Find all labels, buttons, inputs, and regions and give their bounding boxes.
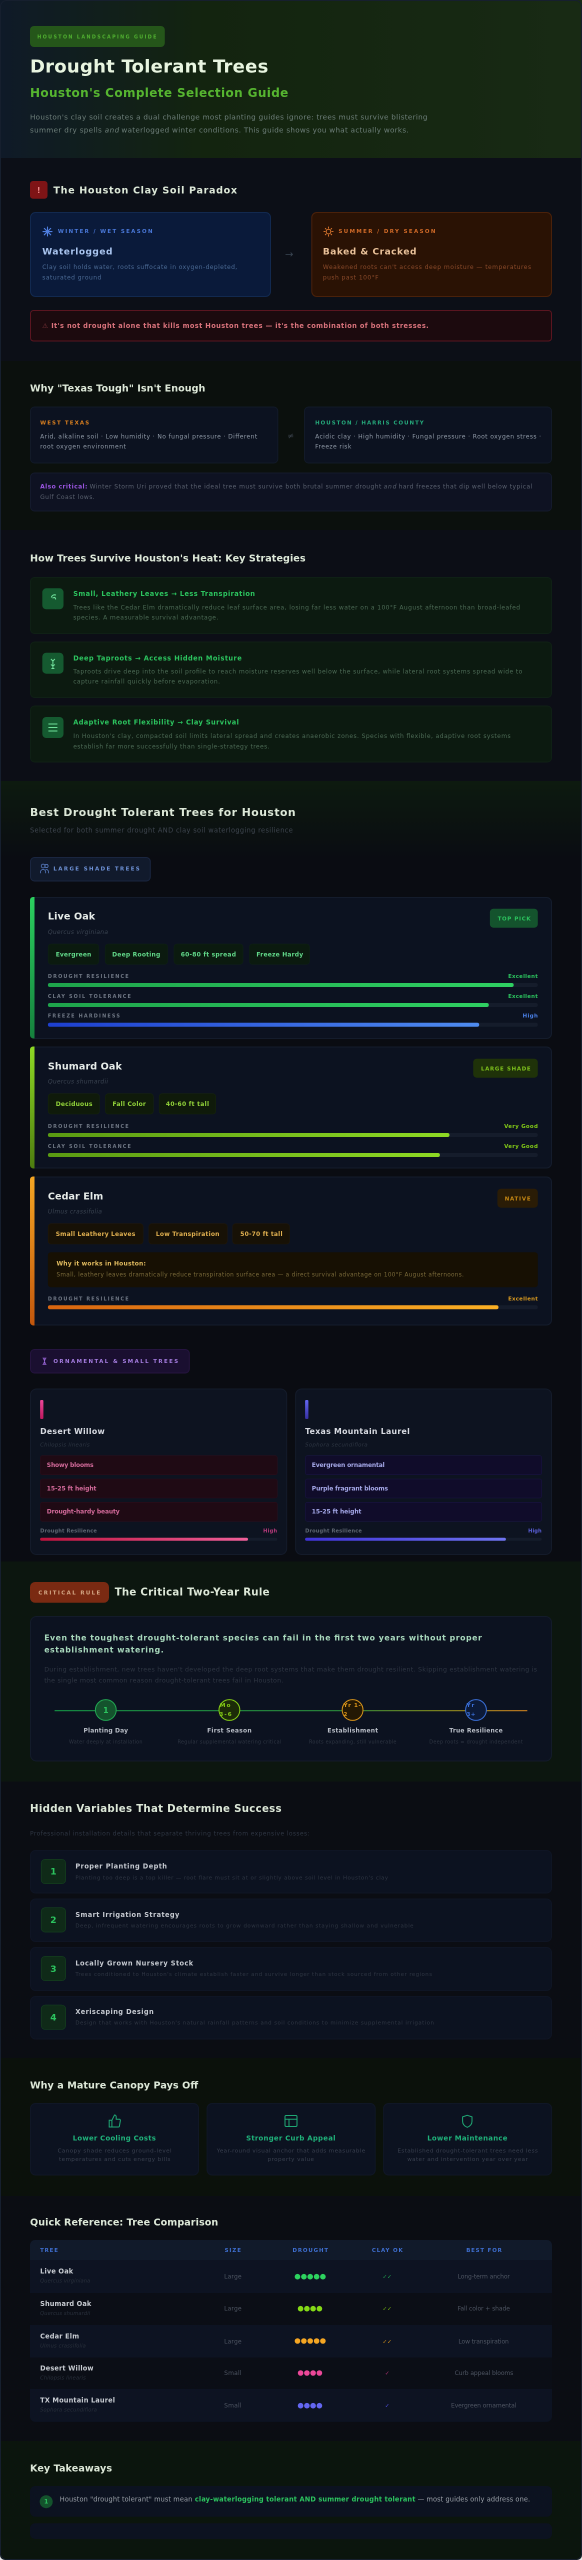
tags: Low Transpiration xyxy=(156,1231,219,1238)
title: Drought Tolerant Trees xyxy=(30,56,268,77)
meter: clay soil tolerance xyxy=(48,994,538,1007)
tags xyxy=(48,1094,216,1114)
card: deep taproots xyxy=(30,642,552,698)
category pill: ornamental and small trees xyxy=(30,1350,189,1373)
category pill: large shade trees xyxy=(30,858,150,881)
row: cedar elm: Large xyxy=(224,2338,242,2345)
tags: Fall Color xyxy=(112,1101,146,1108)
row: live oak: Large xyxy=(224,2274,242,2281)
panel: west texas: root oxygen environment xyxy=(40,444,126,451)
badge: large shade xyxy=(473,1059,538,1078)
row: live oak: ✓✓ xyxy=(383,2275,392,2281)
panel: summer dry season: push past 100°F xyxy=(323,274,379,281)
panel: summer dry season: Baked & Cracked xyxy=(323,247,416,257)
card: desert willow xyxy=(30,1389,287,1554)
step: establishment: Yr 1- xyxy=(342,1703,361,1709)
tags: 50-70 ft tall xyxy=(240,1231,282,1238)
step: planting day: Water deeply at installation xyxy=(69,1739,142,1745)
category pill: large shade trees: LARGE SHADE TREES xyxy=(53,867,140,873)
panel: west texas xyxy=(30,407,278,463)
card: small leathery leaves: Small, Leathery Leaves → Less Transpiration xyxy=(73,590,255,598)
panel: houston harris county: Acidic clay · High humidity · Fungal pressure · Root oxygen stress · xyxy=(315,433,541,440)
feature rows: 15-25 ft height xyxy=(312,1509,362,1516)
table header xyxy=(30,2240,552,2260)
panel: establishment xyxy=(30,1616,552,1761)
card: lower maintenance: Established drought-tolerant trees need less xyxy=(398,2148,538,2154)
meter: drought resilience: Very Good xyxy=(504,1124,538,1130)
takeaway 1: Houston "drought tolerant" must mean xyxy=(60,2495,192,2503)
card: texas mountain laurel: Sophora secundiflora xyxy=(305,1443,368,1449)
callout: also critical xyxy=(30,473,552,511)
heading: Why "Texas Tough" Isn't Enough xyxy=(30,384,206,395)
heading: Hidden Variables That Determine Success xyxy=(30,1804,282,1815)
subheading: Professional installation details that separate thriving trees from expensive losses: xyxy=(30,1830,310,1837)
badge: native: NATIVE xyxy=(505,1196,531,1202)
header xyxy=(0,0,582,158)
row: shumard oak: Fall color + shade xyxy=(458,2306,510,2313)
section: key strategies xyxy=(0,530,582,781)
heading: Key Takeaways xyxy=(30,2464,112,2475)
subtitle: Houston's Complete Selection Guide xyxy=(30,86,288,100)
badge: top pick: TOP PICK xyxy=(498,916,531,922)
lead statement xyxy=(44,1634,482,1655)
card: desert willow: Desert Willow xyxy=(40,1427,105,1436)
callout: combination of stresses xyxy=(30,310,552,341)
icon: snow star xyxy=(43,227,52,236)
step: establishment: Roots expanding, still vulnerable xyxy=(309,1739,396,1745)
heading: Quick Reference: Tree Comparison xyxy=(30,2217,218,2228)
badge: large shade: LARGE SHADE xyxy=(481,1066,531,1072)
item: xeriscaping design xyxy=(30,1996,552,2039)
meter: drought resilience: DROUGHT RESILIENCE xyxy=(48,974,129,980)
step: establishment xyxy=(309,1700,396,1745)
card: shumard oak: Quercus shumardii xyxy=(48,1079,108,1086)
icon: people xyxy=(40,864,48,873)
item: smart irrigation strategy: Deep, infrequent watering encourages roots to grow downward rather than staying shallow and vulnerable xyxy=(75,1924,414,1930)
icon: lines xyxy=(42,717,64,738)
row: cedar elm xyxy=(30,2325,552,2358)
panel: summer dry season xyxy=(312,212,552,296)
icon: alert: ! xyxy=(37,186,40,195)
item: locally grown nursery stock: Locally Grown Nursery Stock xyxy=(75,1959,194,1967)
icon: taproot xyxy=(42,653,64,674)
table header: BEST FOR xyxy=(466,2248,503,2254)
tags: Deep Rooting xyxy=(112,951,160,958)
row: tx mountain laurel: TX Mountain Laurel xyxy=(40,2397,115,2405)
section: why a mature canopy pays off xyxy=(0,2058,582,2196)
heading: How Trees Survive Houston's Heat: Key Strategies xyxy=(30,554,306,565)
table header: TREE xyxy=(40,2248,58,2254)
panel: winter wet season: WINTER / WET SEASON xyxy=(58,229,153,235)
category pill: ornamental and small trees: ORNAMENTAL & SMALL TREES xyxy=(53,1359,178,1365)
callout: also critical: Winter Storm Uri proved that the ideal tree must survive both brutal summer drought xyxy=(90,484,382,491)
callout: also critical: and xyxy=(384,484,397,491)
card: stronger curb appeal xyxy=(207,2104,375,2175)
callout: why it works in houston: Why it works in Houston: xyxy=(56,1260,146,1267)
card: lower maintenance: water and intervention year over year xyxy=(407,2157,528,2163)
item: smart irrigation strategy: Smart Irrigation Strategy xyxy=(75,1911,180,1919)
section: why texas tough isn't enough xyxy=(0,361,582,530)
row: tx mountain laurel: Sophora secundiflora xyxy=(40,2408,97,2414)
panel: winter wet season xyxy=(30,212,270,296)
intro paragraph: Houston's clay soil creates a dual challenge most planting guides ignore: trees must survive blistering xyxy=(30,113,427,122)
heading: Why a Mature Canopy Pays Off xyxy=(30,2080,198,2091)
callout: also critical: Also critical: xyxy=(40,484,87,491)
step: true resilience xyxy=(429,1700,523,1745)
callout: why it works in houston: Small, leathery leaves dramatically reduce transpiration surface area — a direct survival advantage on 100°F August afternoons. xyxy=(56,1272,464,1278)
lead statement: Even the toughest drought-tolerant species can fail in the first two years without proper xyxy=(44,1634,482,1643)
table header: SIZE xyxy=(225,2248,241,2254)
icon: shield xyxy=(463,2115,472,2127)
meter: drought resilience xyxy=(48,1124,538,1137)
row: tx mountain laurel xyxy=(30,2389,552,2422)
takeaway 1: — most guides only address one. xyxy=(418,2495,530,2503)
step: first season: First Season xyxy=(207,1728,252,1735)
badge: critical rule: CRITICAL RULE xyxy=(38,1591,101,1597)
feature rows: Showy blooms xyxy=(47,1462,94,1469)
card: small leathery leaves xyxy=(30,578,552,634)
meter: drought resilience xyxy=(40,1529,278,1541)
row: desert willow: Chilopsis linearis xyxy=(40,2376,86,2382)
lead statement: establishment watering. xyxy=(44,1646,164,1655)
row: cedar elm: ✓✓ xyxy=(383,2339,392,2345)
section: the houston clay soil paradox xyxy=(0,158,582,361)
intro paragraph: and xyxy=(105,125,120,134)
row: desert willow: Desert Willow xyxy=(40,2365,94,2373)
tags: Deciduous xyxy=(56,1101,93,1108)
card: stronger curb appeal: Stronger Curb Appeal xyxy=(246,2134,336,2142)
item: proper planting depth: Proper Planting Depth xyxy=(75,1863,167,1871)
icon: thumbs up xyxy=(109,2115,120,2127)
intro paragraph: waterlogged winter conditions. This guide shows you what actually works. xyxy=(121,125,409,134)
feature rows: 15-25 ft height xyxy=(47,1485,97,1492)
step: planting day xyxy=(69,1700,142,1745)
item: xeriscaping design: 4 xyxy=(50,2014,57,2024)
step: first season: 3-6 xyxy=(219,1712,232,1718)
tags xyxy=(48,944,309,964)
step: true resilience: 3+ xyxy=(466,1712,476,1718)
card: small leathery leaves: Trees like the Cedar Elm dramatically reduce leaf surface area, losing far less water on a 100°F August afternoon than broad-leafed xyxy=(72,604,520,611)
heading: The Critical Two-Year Rule xyxy=(115,1588,270,1599)
row: desert willow: ✓ xyxy=(385,2371,390,2377)
table header: DROUGHT xyxy=(292,2248,328,2254)
tags: 60-80 ft spread xyxy=(181,951,236,958)
callout: combination of stresses: ⚠ xyxy=(42,322,48,330)
heading: The Houston Clay Soil Paradox xyxy=(53,185,238,196)
section: best drought tolerant trees xyxy=(0,781,582,1562)
row: desert willow xyxy=(30,2358,552,2389)
panel: summer dry season: SUMMER / DRY SEASON xyxy=(338,229,436,235)
table header: CLAY OK xyxy=(372,2248,404,2254)
badge: critical rule xyxy=(30,1582,109,1603)
row: tx mountain laurel: Small xyxy=(224,2403,242,2410)
not-equal symbol: ≠ xyxy=(287,431,294,440)
tags: Small Leathery Leaves xyxy=(56,1231,136,1238)
card: lower cooling costs xyxy=(30,2104,198,2175)
step: planting day: Planting Day xyxy=(84,1728,128,1735)
meter: drought resilience: High xyxy=(263,1529,278,1535)
tags xyxy=(48,1224,290,1244)
row: live oak: Quercus virginiana xyxy=(40,2279,90,2285)
card: lower cooling costs: Canopy shade reduces ground-level xyxy=(58,2148,172,2154)
card: adaptive root flexibility: Adaptive Root Flexibility → Clay Survival xyxy=(73,718,239,726)
arrow: → xyxy=(285,250,293,260)
row: live oak: Live Oak xyxy=(40,2268,74,2276)
takeaway 1: 1 xyxy=(44,2499,48,2506)
item: xeriscaping design: Design that works with Houston's natural rainfall patterns and soil conditions to minimize supplemental irrigation xyxy=(75,2021,434,2027)
panel: winter wet season: Clay soil holds water, roots suffocate in oxygen-depleted, xyxy=(42,264,237,271)
card: shumard oak xyxy=(30,1046,552,1168)
row: desert willow: Curb appeal blooms xyxy=(455,2370,513,2377)
paragraph: During establishment, new trees haven't developed the deep root systems that make them drought resilient. Skipping establishment watering is xyxy=(44,1666,537,1673)
intro paragraph: summer dry spells xyxy=(30,125,102,134)
row: shumard oak: Shumard Oak xyxy=(40,2300,92,2308)
item: locally grown nursery stock xyxy=(30,1948,552,1990)
step: planting day: 1 xyxy=(103,1706,109,1715)
item: smart irrigation strategy xyxy=(30,1899,552,1942)
meter: clay soil tolerance: Very Good xyxy=(504,1144,538,1150)
badge: houston landscaping guide xyxy=(30,26,165,47)
card: desert willow: Chilopsis linearis xyxy=(40,1443,90,1449)
step: true resilience: True Resilience xyxy=(449,1728,503,1735)
panel: west texas: Arid, alkaline soil · Low humidity · No fungal pressure · Different xyxy=(40,433,258,440)
meter: drought resilience: DROUGHT RESILIENCE xyxy=(48,1296,129,1302)
card: adaptive root flexibility xyxy=(30,706,552,762)
row: shumard oak: ✓✓ xyxy=(383,2307,392,2313)
badge: houston landscaping guide: HOUSTON LANDSCAPING GUIDE xyxy=(37,35,156,41)
icon: sun xyxy=(324,227,333,236)
takeaway 1: clay-waterlogging tolerant AND summer drought tolerant xyxy=(195,2495,415,2503)
meter: drought resilience: High xyxy=(528,1529,542,1535)
accent bar xyxy=(40,1400,43,1419)
feature rows: Evergreen ornamental xyxy=(312,1462,385,1469)
subheading: Selected for both summer drought AND clay soil waterlogging resilience xyxy=(30,827,293,835)
row: desert willow: Small xyxy=(224,2370,242,2377)
item: proper planting depth: Planting too deep is a top killer — root flare must sit at or slightly above soil level in Houston's clay xyxy=(75,1875,389,1881)
badge: native xyxy=(497,1189,538,1208)
step: true resilience: Deep roots = drought independent xyxy=(429,1739,523,1745)
panel: houston harris county: Freeze risk xyxy=(315,444,352,451)
row: live oak: Long-term anchor xyxy=(458,2274,510,2281)
feature rows xyxy=(40,1456,277,1521)
feature rows: Purple fragrant blooms xyxy=(312,1485,389,1492)
icon: hourglass xyxy=(42,1358,46,1364)
card: texas mountain laurel xyxy=(296,1389,552,1554)
panel: summer dry season: Weakened roots can't access deep moisture — temperatures xyxy=(323,264,531,271)
meter: drought resilience: Excellent xyxy=(508,974,538,980)
callout: combination of stresses: It's not drought alone that kills most Houston trees — it's the combination of both stresses. xyxy=(51,322,429,330)
paragraph xyxy=(44,1666,537,1685)
meter: clay soil tolerance: CLAY SOIL TOLERANCE xyxy=(48,994,131,1000)
card: stronger curb appeal: property value xyxy=(268,2157,315,2163)
card: live oak xyxy=(30,897,552,1038)
meter: drought resilience: DROUGHT RESILIENCE xyxy=(48,1124,129,1130)
paragraph: the single most common reason drought-tolerant trees fail in Houston. xyxy=(44,1678,283,1685)
card: lower maintenance: Lower Maintenance xyxy=(427,2134,508,2142)
card: live oak: Quercus virginiana xyxy=(48,929,108,936)
card: deep taproots: Deep Taproots → Access Hidden Moisture xyxy=(73,654,242,662)
section: quick reference xyxy=(0,2196,582,2441)
item: locally grown nursery stock: Trees conditioned to Houston's climate establish faster and survive longer than stock sourced from other regions xyxy=(74,1972,432,1978)
card: lower maintenance xyxy=(384,2104,552,2175)
tags: 40-60 ft tall xyxy=(166,1101,209,1108)
card: lower cooling costs: Lower Cooling Costs xyxy=(73,2134,156,2142)
icon: layout xyxy=(285,2116,297,2126)
panel: winter wet season: Waterlogged xyxy=(42,247,112,257)
callout: why it works in houston xyxy=(48,1252,538,1287)
row: shumard oak: Large xyxy=(224,2306,242,2313)
card: texas mountain laurel: Texas Mountain Laurel xyxy=(305,1427,410,1436)
accent bar xyxy=(305,1400,308,1419)
step: establishment: Establishment xyxy=(327,1728,378,1735)
card: live oak: Live Oak xyxy=(48,911,96,922)
step: true resilience: Yr xyxy=(466,1703,475,1709)
card: lower cooling costs: temperatures and cuts energy bills xyxy=(59,2157,170,2163)
panel: houston harris county xyxy=(304,407,552,463)
feature rows: Drought-hardy beauty xyxy=(47,1509,120,1516)
meter: clay soil tolerance xyxy=(48,1144,538,1157)
icon: leaf xyxy=(42,588,64,609)
item: xeriscaping design: Xeriscaping Design xyxy=(75,2008,154,2016)
step: first season: Mo xyxy=(220,1703,231,1709)
item: proper planting depth xyxy=(30,1850,552,1893)
comparison table xyxy=(30,2240,552,2422)
meter: freeze hardiness: FREEZE HARDINESS xyxy=(48,1014,120,1020)
item: proper planting depth: 1 xyxy=(50,1868,57,1878)
step: establishment: 2 xyxy=(344,1712,348,1718)
row: tx mountain laurel: Evergreen ornamental xyxy=(451,2403,517,2410)
row: shumard oak xyxy=(30,2293,552,2325)
bottom corners xyxy=(0,2555,582,2560)
meter: drought resilience: Drought Resilience xyxy=(305,1529,362,1535)
card: stronger curb appeal: Year-round visual anchor that adds measurable xyxy=(216,2148,366,2154)
tags: Evergreen xyxy=(56,951,91,958)
meter: drought resilience xyxy=(48,1296,538,1309)
row: live oak xyxy=(30,2260,552,2293)
meter: drought resilience xyxy=(305,1529,542,1541)
row: cedar elm: Cedar Elm xyxy=(40,2332,79,2340)
meter: clay soil tolerance: CLAY SOIL TOLERANCE xyxy=(48,1144,131,1150)
panel: houston harris county: HOUSTON / HARRIS COUNTY xyxy=(315,420,424,426)
timeline xyxy=(55,1700,527,1745)
card: deep taproots: Taproots drive deep into the soil profile to reach moisture reserves well below the surface, while lateral root systems spread wide to xyxy=(72,668,523,675)
row: cedar elm: Low transpiration xyxy=(458,2338,509,2345)
card: deep taproots: capture rainfall quickly before evaporation. xyxy=(73,679,220,686)
section: key takeaways xyxy=(0,2441,582,2560)
meter: drought resilience: Excellent xyxy=(508,1296,538,1302)
step: first season xyxy=(178,1700,281,1745)
panel: winter wet season: saturated ground xyxy=(42,274,101,281)
feature rows xyxy=(305,1456,542,1521)
card: cedar elm: Ulmus crassifolia xyxy=(48,1209,102,1216)
tags: Freeze Hardy xyxy=(256,951,303,958)
card: adaptive root flexibility: establish far more successfully than single-strategy trees. xyxy=(73,743,270,750)
meter: freeze hardiness xyxy=(48,1014,538,1027)
badge: top pick xyxy=(490,909,538,928)
callout: also critical: hard freezes that dip well below typical xyxy=(399,484,533,491)
card: shumard oak: Shumard Oak xyxy=(48,1061,123,1072)
takeaway 2 (empty card) xyxy=(30,2523,552,2539)
takeaway 1 xyxy=(30,2486,552,2517)
item: locally grown nursery stock: 3 xyxy=(50,1965,57,1975)
section: critical two-year rule xyxy=(0,1562,582,1782)
heading: Best Drought Tolerant Trees for Houston xyxy=(30,806,296,819)
card: small leathery leaves: species. A measurable survival advantage. xyxy=(73,615,218,622)
row: tx mountain laurel: ✓ xyxy=(385,2404,390,2410)
item: smart irrigation strategy: 2 xyxy=(50,1916,57,1926)
meter: drought resilience xyxy=(48,974,538,987)
meter: freeze hardiness: High xyxy=(523,1014,538,1020)
meter: drought resilience: Drought Resilience xyxy=(40,1529,97,1535)
row: shumard oak: Quercus shumardii xyxy=(40,2311,91,2317)
callout: also critical: Gulf Coast lows. xyxy=(40,494,95,501)
section: hidden variables xyxy=(0,1782,582,2058)
row: cedar elm: Ulmus crassifolia xyxy=(40,2343,86,2349)
intro paragraph xyxy=(30,113,427,134)
panel: west texas: WEST TEXAS xyxy=(40,420,89,426)
card: cedar elm: Cedar Elm xyxy=(48,1191,103,1202)
icon: alert xyxy=(30,181,48,199)
card: cedar elm xyxy=(30,1176,552,1326)
meter: clay soil tolerance: Excellent xyxy=(508,994,538,1000)
card: adaptive root flexibility: In Houston's clay, compacted soil limits lateral spread and creates anaerobic zones. Species with flexible, adaptive root systems xyxy=(73,733,511,740)
step: first season: Regular supplemental watering critical xyxy=(178,1739,281,1745)
